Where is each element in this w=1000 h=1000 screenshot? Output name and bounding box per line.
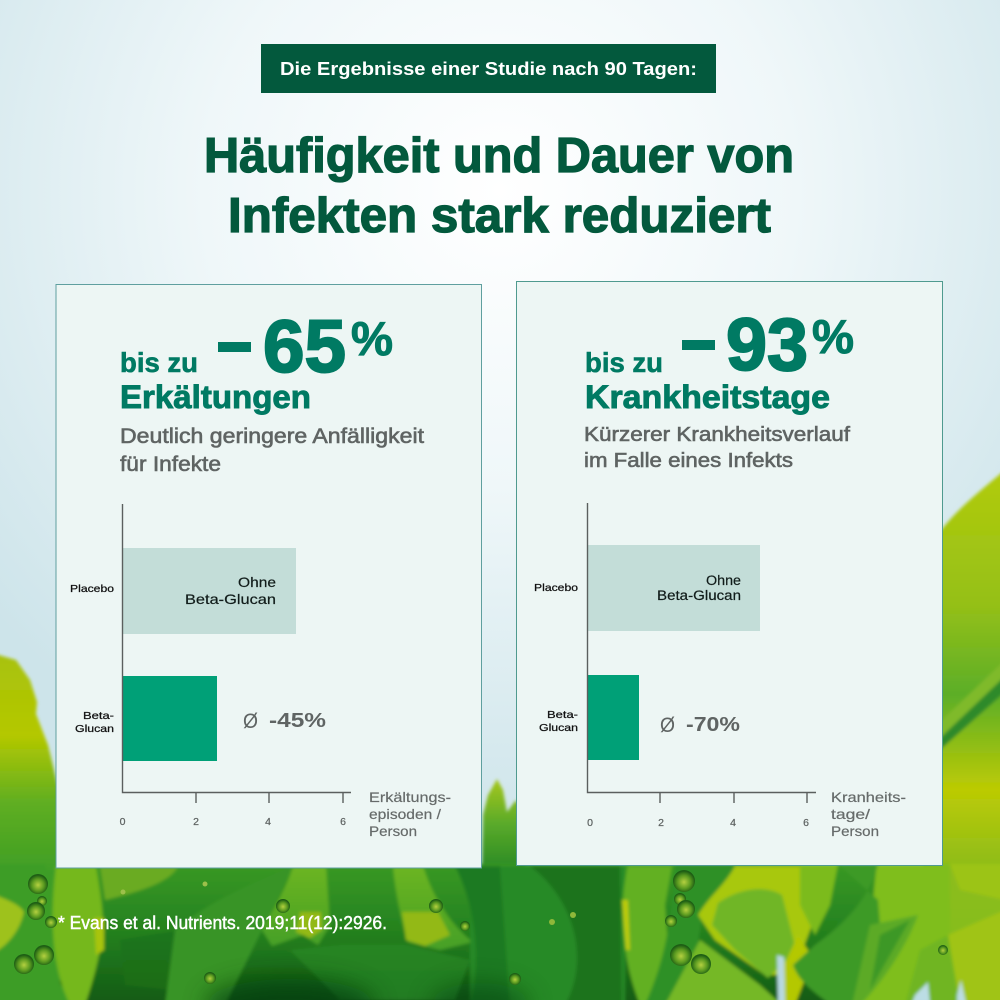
axis tick labels — [120, 816, 346, 828]
category labels: Glucan — [75, 723, 114, 735]
bar chart: Krankheitstage — [534, 503, 906, 839]
average label: Ø — [660, 714, 675, 737]
axis title: Kranheits- — [831, 789, 906, 805]
panel: Erkältungen — [56, 284, 482, 868]
axis title: episoden / — [369, 806, 441, 822]
headline: bis zu -93%: % — [812, 310, 854, 363]
average label: -45% — [269, 710, 326, 732]
headline: bis zu -65%: bis zu — [120, 347, 198, 378]
right leaf — [920, 470, 1000, 1000]
bar: Placebo: Ohne — [706, 573, 741, 588]
background: water bubbles — [14, 870, 948, 985]
axes — [588, 503, 816, 803]
left leaf — [0, 654, 60, 880]
headline: bis zu -93% — [585, 303, 854, 415]
background: seaweed leaves — [0, 470, 1000, 1000]
category labels: Placebo — [70, 583, 114, 595]
description: im Falle eines Infekts — [584, 450, 793, 472]
left side leaves — [58, 984, 69, 1000]
bar: Placebo: Beta-Glucan — [185, 591, 276, 607]
axis tick labels: 2 — [658, 817, 664, 829]
average label: -70% — [686, 714, 740, 736]
axis tick labels: 6 — [803, 817, 809, 829]
description — [584, 424, 850, 472]
axis title — [369, 789, 451, 839]
category labels: Placebo — [534, 582, 578, 594]
description: für Infekte — [120, 453, 221, 476]
header banner: Die Ergebnisse einer Studie nach 90 Tagen: — [280, 59, 697, 79]
lower seaweed base — [60, 864, 950, 1000]
panel: Krankheitstage — [516, 282, 942, 866]
category labels: Beta- — [83, 710, 115, 722]
bar: Placebo — [588, 545, 760, 631]
average label — [660, 714, 740, 737]
bar: Placebo: Ohne — [238, 574, 276, 590]
axis tick labels: 6 — [340, 816, 346, 828]
headline: bis zu -93%: 93 — [726, 303, 808, 386]
axis title — [831, 789, 906, 839]
category labels — [70, 583, 115, 735]
bar: Placebo — [123, 548, 296, 634]
headline: bis zu -93%: bis zu — [585, 347, 663, 378]
category labels: Beta- — [547, 709, 579, 721]
gap leaf between panels — [482, 778, 525, 867]
axis tick labels: 2 — [193, 816, 199, 828]
title: Häufigkeit und Dauer von — [204, 129, 794, 183]
category labels: Glucan — [539, 722, 578, 734]
axis title: Person — [831, 823, 879, 839]
axis tick labels: 4 — [265, 816, 271, 828]
headline: bis zu -65%: % — [351, 312, 393, 365]
headline: bis zu -65% — [120, 305, 393, 415]
average label — [243, 710, 326, 733]
title: Infekten stark reduziert — [228, 189, 771, 243]
headline: bis zu -93%: Krankheitstage — [585, 379, 830, 415]
axis tick labels — [587, 817, 809, 829]
footnote: * Evans et al. Nutrients. 2019;11(12):2926. — [58, 913, 387, 933]
bar chart: Erkältungsepisoden — [70, 504, 451, 839]
sky glimpses — [777, 955, 785, 1000]
bar: Placebo: Beta-Glucan — [657, 588, 741, 603]
headline: bis zu -65%: Erkältungen — [120, 379, 311, 415]
description: Deutlich geringere Anfälligkeit — [120, 425, 424, 448]
axis tick labels: 0 — [587, 817, 593, 829]
description — [120, 425, 424, 476]
dark shading at bottom centre — [205, 979, 375, 1000]
title — [204, 129, 794, 243]
middle dark leaves — [100, 866, 178, 900]
axes — [122, 504, 351, 803]
central right leaves — [623, 866, 672, 1000]
header banner — [261, 44, 716, 93]
axis title: Erkältungs- — [369, 789, 451, 805]
headline: bis zu -65%: 65 — [263, 305, 346, 388]
average label: Ø — [243, 710, 258, 733]
axis title: Person — [369, 823, 417, 839]
bar: Beta-Glucan — [588, 675, 639, 760]
axis tick labels: 4 — [730, 817, 736, 829]
category labels — [534, 582, 579, 734]
description: Kürzerer Krankheitsverlauf — [584, 424, 850, 446]
bar: Beta-Glucan — [122, 676, 217, 761]
axis title: tage/ — [831, 806, 870, 822]
axis tick labels: 0 — [120, 816, 126, 828]
